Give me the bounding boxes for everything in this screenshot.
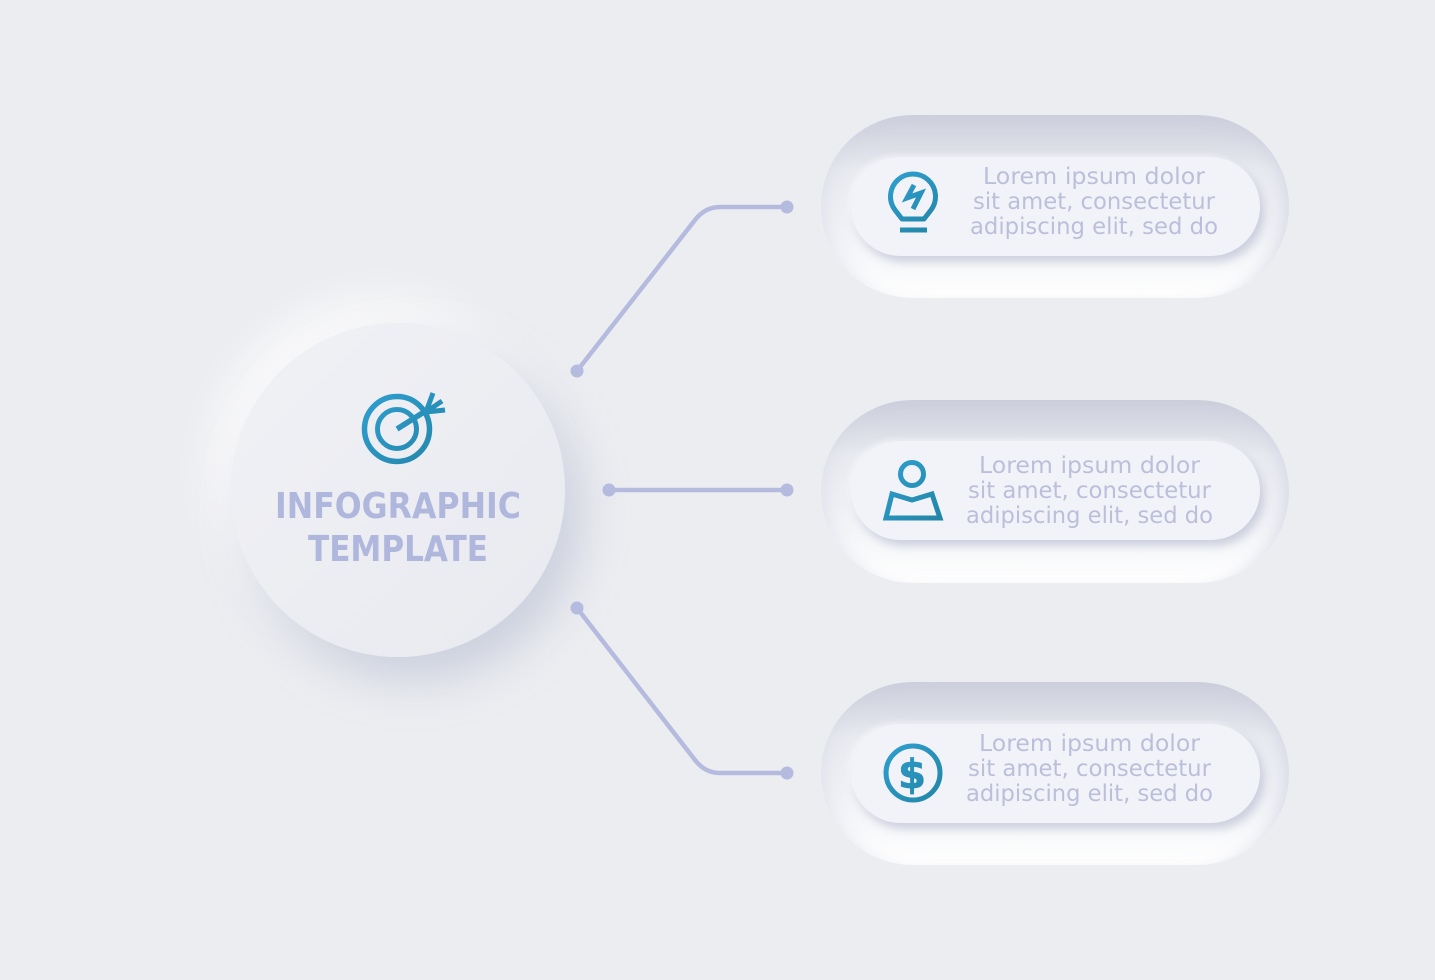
text: row 1: sit amet, consectetur — [973, 189, 1216, 215]
text: row 2: sit amet, consectetur — [968, 478, 1212, 504]
text: row 3 — [966, 731, 1213, 807]
icon: light bulb — [890, 174, 936, 230]
panel: row 2 inner pill — [851, 441, 1260, 540]
icon: dollar coin — [886, 746, 940, 800]
panel: row 3 outer pill — [821, 682, 1289, 865]
text: row 3: adipiscing elit, sed do — [966, 781, 1213, 807]
text: row 1 — [970, 164, 1218, 240]
text: row 2: Lorem ipsum dolor — [979, 453, 1201, 479]
icon: dollar coin: $ — [898, 752, 926, 798]
icon: target with arrow — [364, 393, 445, 462]
heading: infographic template — [275, 486, 521, 570]
panel: row 2 outer pill — [821, 400, 1289, 583]
connector: middle — [602, 484, 794, 496]
text: row 1: adipiscing elit, sed do — [970, 214, 1218, 240]
panel: row 1 inner pill — [851, 157, 1260, 256]
connector: bottom — [570, 602, 794, 780]
text: row 1: Lorem ipsum dolor — [983, 164, 1206, 190]
text: row 2: adipiscing elit, sed do — [966, 503, 1213, 529]
connector: top — [570, 200, 794, 378]
heading: infographic template: INFOGRAPHIC — [275, 486, 521, 527]
text: row 2 — [966, 453, 1213, 529]
panel: row 1 outer pill — [821, 115, 1289, 298]
icon: person — [886, 462, 940, 518]
panel: central circle — [231, 323, 565, 657]
text: row 3: sit amet, consectetur — [968, 756, 1212, 782]
heading: infographic template: TEMPLATE — [308, 529, 488, 570]
panel: row 3 inner pill — [851, 724, 1260, 823]
text: row 3: Lorem ipsum dolor — [979, 731, 1201, 757]
